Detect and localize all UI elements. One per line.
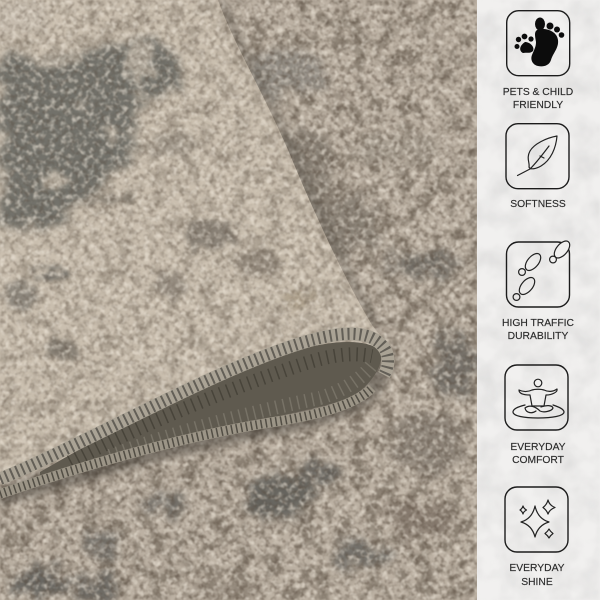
label: EVERYDAY [509,563,565,574]
label: SHINE [521,577,553,588]
shadow of the roll on the floor [222,0,376,325]
feature: softness [506,124,569,210]
icon: feather [506,124,569,189]
label: EVERYDAY [510,442,566,453]
icon: paw and foot prints [507,11,570,76]
feature: pets and child friendly [503,11,573,111]
feature: everyday comfort [505,365,568,466]
rug floor background [0,0,477,600]
label: DURABILITY [508,331,568,342]
label: PETS & CHILD [503,87,573,98]
label: SOFTNESS [510,199,566,210]
icon: footprints [506,238,573,307]
rolled rug top surface [0,0,400,490]
rug underside and bound edge [0,334,395,506]
label: COMFORT [512,455,565,466]
label: HIGH TRAFFIC [502,318,575,329]
feature: high traffic durability [502,238,575,342]
label: FRIENDLY [513,100,563,111]
icon: sparkles [505,487,568,552]
feature: everyday shine [505,487,568,588]
right feature panel background [477,0,600,600]
icon: meditating figure [505,365,568,430]
